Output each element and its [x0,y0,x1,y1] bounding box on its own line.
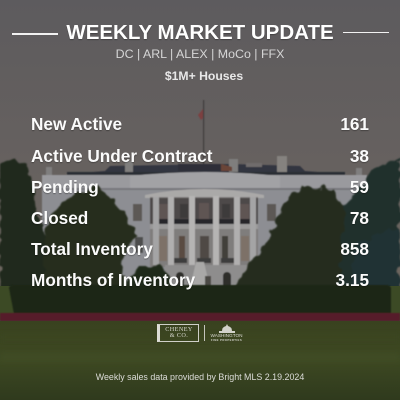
row: months of inventory [31,270,369,290]
row: closed: 78 [350,208,369,228]
logo: Washington Fine Properties [210,324,243,342]
logo: Cheney & Co.: & CO. [170,332,188,339]
row: pending: Pending [31,177,99,197]
lawn and hedge [0,286,400,320]
row: active under contract [31,146,369,166]
icon: capitol dome [219,324,235,333]
balustrade [42,175,367,190]
subheading: segment: $1M+ Houses [165,69,243,83]
portico [150,197,258,267]
row: months of inventory: Months of Inventory [31,270,195,290]
row: new active: New Active [31,114,122,134]
side windows [133,204,142,221]
row: pending [31,177,369,198]
logo wordmark: WASHINGTON [210,333,243,338]
logo divider [204,325,205,341]
row: closed [31,208,369,228]
subtitle: areas: DC | ARL | ALEX | MoCo | FFX [116,47,284,61]
row: total inventory: Total Inventory [31,239,153,259]
flag [203,100,204,172]
title divider right [343,32,389,33]
footer source note: Weekly sales data provided by Bright MLS 2.19.2024 [96,372,304,382]
row: total inventory [31,239,369,260]
trees [0,157,46,292]
row: total inventory: 858 [340,239,369,259]
ground floor and steps [165,265,250,288]
row: active under contract: Active Under Contract [31,146,212,166]
title divider left [12,33,58,34]
facade [42,190,367,288]
chimneys and roof [67,164,345,174]
row: months of inventory: 3.15 [336,270,369,290]
row: closed: Closed [31,208,88,228]
row: new active [31,114,369,134]
columns [153,197,159,265]
row: active under contract: 38 [350,146,369,166]
stats table [31,114,369,290]
title: WEEKLY MARKET UPDATE [66,21,334,44]
row: pending: 59 [350,177,369,197]
row: new active: 161 [340,114,369,134]
logo: Cheney & Co. [157,324,199,342]
logo: Cheney & Co.: CHENEY [165,326,193,332]
logo tagline: FINE PROPERTIES [211,338,242,342]
